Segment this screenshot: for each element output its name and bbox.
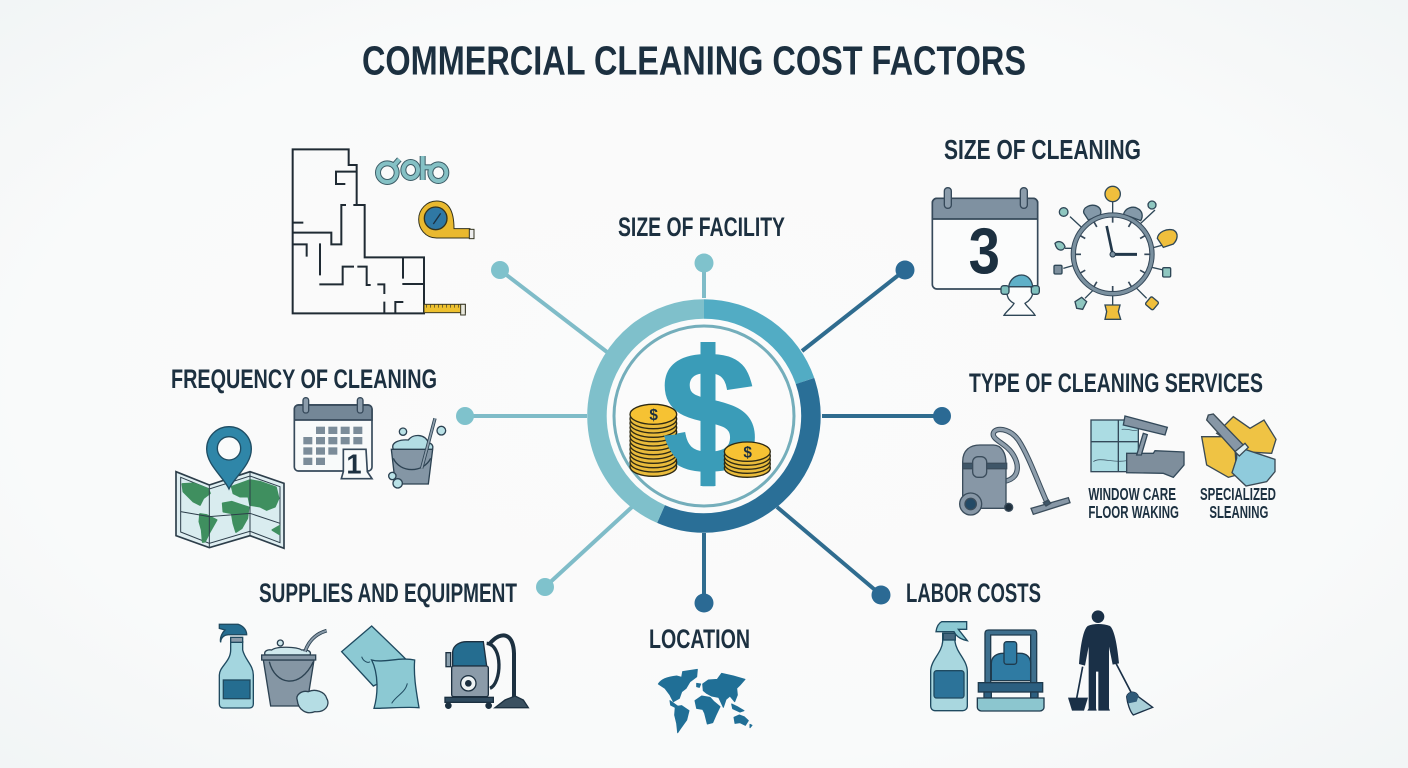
bucket with sponge	[262, 631, 328, 713]
specialized cleaning caption: SLEANING	[1209, 502, 1268, 522]
connector spokes and end dots	[456, 254, 951, 612]
window and squeegee with floor	[1091, 416, 1184, 477]
coin stacks	[630, 404, 770, 477]
location pin	[207, 427, 251, 489]
specialized cleaning cloths	[1202, 414, 1276, 486]
tape measure	[419, 201, 474, 239]
clock satellites	[1054, 186, 1177, 319]
spray bottle	[931, 622, 967, 711]
icon group: calendar and clock	[932, 186, 1177, 319]
folded world map	[176, 472, 284, 548]
window care caption: FLOOR WAKING	[1088, 502, 1179, 522]
window care caption	[1088, 484, 1179, 522]
label: type of cleaning services: TYPE OF CLEANING SERVICES	[969, 368, 1263, 398]
floor machine	[977, 630, 1044, 711]
ring glyph doodle	[378, 156, 446, 182]
bucket with mop	[389, 418, 446, 488]
specialized cleaning caption: SPECIALIZED	[1200, 484, 1276, 504]
icon group: floor plan with tape measure	[293, 149, 474, 315]
calendar with squares	[294, 398, 372, 479]
central ring with dollar sign and coins	[597, 309, 811, 523]
canister vacuum	[445, 635, 528, 708]
coin stacks: $	[649, 407, 658, 424]
label: location: LOCATION	[649, 624, 750, 654]
icon: world map	[658, 669, 752, 733]
icon group: map, calendar and bucket	[176, 398, 446, 548]
calendar page with number 3	[932, 188, 1038, 289]
title: COMMERCIAL CLEANING COST FACTORS	[362, 38, 1026, 84]
label: size of facility: SIZE OF FACILITY	[618, 212, 785, 242]
label: frequency of cleaning: FREQUENCY OF CLEANING	[171, 364, 437, 394]
specialized cleaning caption	[1200, 484, 1276, 522]
folded cloths	[342, 626, 419, 708]
spray bottle	[219, 624, 253, 708]
dollar sign: $	[660, 317, 756, 509]
icon group: supplies and equipment	[219, 624, 528, 713]
ring segments	[597, 309, 811, 523]
clock face	[1073, 215, 1152, 294]
icon group: labor costs	[931, 610, 1153, 715]
label: labor costs: LABOR COSTS	[906, 578, 1041, 608]
person figure	[1001, 275, 1039, 315]
calendar with squares: 1	[346, 448, 362, 479]
label: supplies and equipment: SUPPLIES AND EQUIPMENT	[259, 578, 517, 608]
label: size of cleaning: SIZE OF CLEANING	[944, 134, 1141, 165]
icon group: cleaning service types	[960, 414, 1276, 522]
vacuum cleaner	[960, 429, 1070, 515]
calendar page with number 3: 3	[969, 215, 1000, 288]
ruler strip	[424, 304, 465, 315]
floor plan	[293, 149, 424, 313]
janitor silhouette with mop and broom	[1068, 610, 1153, 715]
coin stacks: $	[743, 444, 752, 461]
window care caption: WINDOW CARE	[1088, 484, 1176, 504]
